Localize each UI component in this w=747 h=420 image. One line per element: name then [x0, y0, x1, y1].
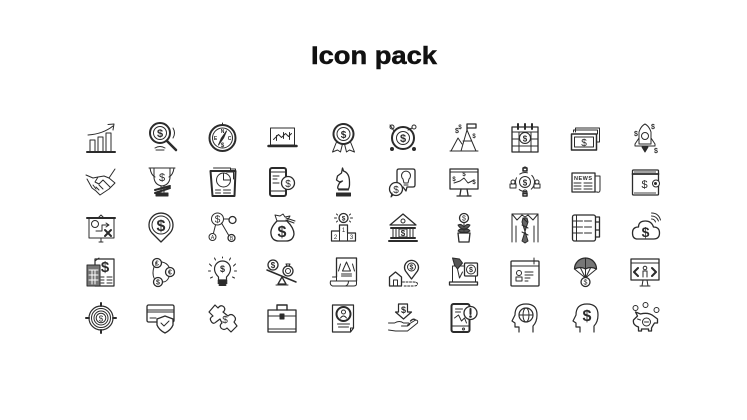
icon: balance seesaw: $: [271, 261, 276, 270]
icon: currency network: A: [211, 235, 215, 241]
icon: head dollar: $: [583, 308, 592, 325]
icon: people around dollar: $: [523, 178, 528, 188]
icon: calendar dollar: $: [523, 134, 528, 144]
icon: mountain flag: [450, 124, 478, 151]
icon: currency exchange cycle: $: [156, 280, 160, 286]
icon: people around dollar: [510, 167, 540, 196]
icon: trophy: [149, 168, 175, 196]
icon: podium: [332, 214, 356, 241]
icon: currency exchange cycle: ₤: [155, 260, 159, 268]
icon: browser profile: [511, 258, 539, 286]
icon: dollar target: $: [99, 314, 104, 324]
icon: mountain flag: $: [455, 128, 459, 135]
icon: dollar network: [390, 125, 416, 150]
icon: puzzle pieces: $: [222, 315, 228, 326]
icon: bank: [389, 214, 417, 241]
icon: currency network: [209, 213, 236, 242]
icon: hand receiving dollar: [388, 304, 418, 331]
icon: laptop growth: $: [469, 267, 473, 274]
icon: piggy bank: [633, 302, 659, 331]
icon: head dollar: [573, 304, 598, 332]
icon: house and route pin: [390, 260, 418, 286]
icon: award ribbon: [332, 124, 354, 152]
icon: card shield: [147, 305, 174, 333]
icon: podium: 1: [342, 228, 346, 234]
icon: dollar light bulb: [208, 257, 236, 285]
icon: currency network: B: [230, 236, 234, 242]
icon: mobile payment: [270, 168, 294, 196]
icon: cloud dollar wifi: $: [642, 224, 650, 240]
title: Icon pack: [311, 42, 437, 70]
icon: dollar target: [86, 303, 116, 333]
icon: banknotes: $: [581, 138, 587, 149]
icon: laptop growth: [450, 258, 478, 285]
icon: handshake: [86, 169, 115, 195]
icon: monitor chart: [450, 169, 478, 196]
icon: contract scroll: [330, 258, 356, 286]
icon: banknotes: [572, 128, 600, 150]
icon: rocket: $: [651, 124, 655, 131]
icon: monitor chart: $: [462, 172, 466, 178]
icon: calculator and invoice: [87, 258, 114, 286]
icon: monitor code: [631, 259, 659, 286]
icon: head globe: [512, 304, 537, 332]
icon: dollar network: $: [400, 133, 406, 145]
icon: location pin dollar: $: [157, 218, 166, 235]
icon: mountain flag: $: [472, 134, 476, 140]
icon: pie chart report: [210, 168, 236, 196]
icon: dollar compass: C: [228, 136, 232, 142]
icon: chess knight: [336, 168, 350, 196]
icon: wallet: $: [641, 179, 648, 191]
icon: trophy: $: [159, 172, 165, 184]
icon: money bag: $: [278, 224, 287, 241]
icon: house and route pin: $: [410, 264, 414, 272]
icon: newspaper: [572, 173, 600, 192]
icon: award ribbon: $: [341, 130, 347, 141]
icon: calculator and invoice: $: [101, 259, 110, 276]
icon: laptop chart: [268, 128, 296, 146]
icon: money plant: $: [462, 216, 466, 222]
icon: cloud dollar wifi: [632, 213, 660, 240]
icon: monitor chart: $: [472, 180, 476, 186]
icon: rocket: [634, 124, 658, 155]
icon grid: [86, 123, 660, 333]
icon: rocket: $: [654, 148, 658, 155]
icon: dollar compass: $: [221, 143, 225, 149]
icon: parachute dollar: [574, 258, 596, 286]
icon: mobile payment: $: [285, 179, 291, 190]
icon: dollar compass: [210, 123, 236, 151]
icon: currency exchange cycle: [152, 258, 174, 286]
icon: parachute dollar: $: [584, 280, 588, 286]
icon: location pin dollar: [149, 213, 173, 242]
icon: balance seesaw: [267, 260, 296, 285]
icon: podium: 3: [350, 235, 354, 241]
icon: growth bar chart: [87, 124, 115, 152]
icon: dollar compass: E: [214, 136, 218, 142]
icon: certificate: [332, 305, 354, 332]
icon: monitor chart: $: [452, 177, 456, 183]
icon: hand receiving dollar: $: [401, 305, 406, 315]
icon: puzzle pieces: [209, 305, 237, 332]
icon: notebook: [572, 215, 600, 241]
icon: calendar dollar: [512, 124, 538, 152]
icon: currency network: $: [215, 214, 221, 226]
icon: idea speech bubbles: $: [393, 185, 399, 196]
icon: strategy board: [87, 215, 115, 242]
icon: money bag: [271, 214, 295, 241]
icon: mobile alert: [452, 304, 477, 332]
icon: dollar compass: N: [221, 129, 225, 135]
icon: podium: 2: [334, 235, 338, 241]
icon: briefcase: [268, 305, 296, 332]
icon: wallet: [632, 170, 660, 195]
icon: shirt and tie: [512, 214, 538, 243]
icon: money plant: [458, 214, 470, 242]
icon: dollar light bulb: $: [220, 264, 225, 274]
icon: podium: $: [342, 216, 346, 222]
icon: currency exchange cycle: €: [168, 270, 172, 276]
icon: idea speech bubbles: [390, 169, 415, 197]
icon: dollar magnifier: $: [157, 128, 163, 140]
icon: mountain flag: $: [458, 125, 462, 131]
icon: dollar magnifier: [150, 123, 176, 150]
icon: rocket: $: [634, 131, 638, 138]
icon: bank: $: [401, 229, 406, 238]
icon: newspaper: NEWS: [574, 176, 592, 182]
